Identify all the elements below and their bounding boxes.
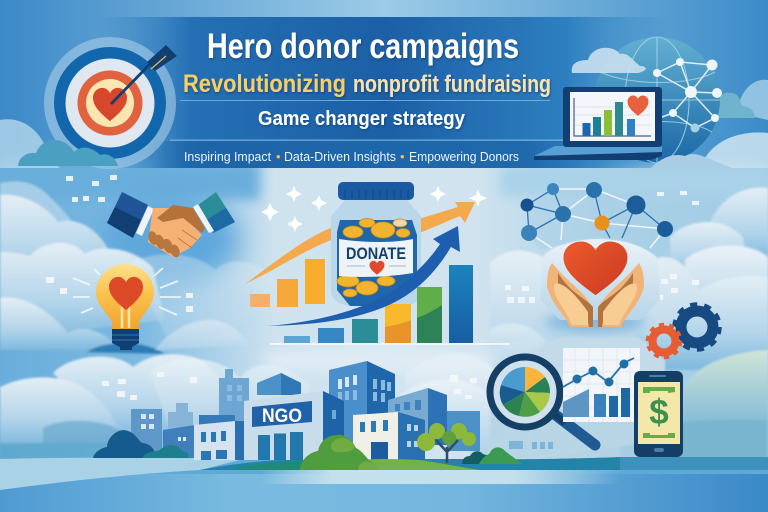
green hill [300,459,480,470]
jar label: DONATE [346,244,406,263]
bar chart: rising multicolour bars [270,265,510,345]
icon: magnifying glass with pie chart [490,357,595,445]
bar chart: rising orange bars [250,259,325,307]
pie chart [500,367,550,417]
bushes right [462,451,494,464]
left clouds [0,181,72,250]
background buildings [131,361,480,458]
icon: network graph [520,182,673,255]
ground and water [0,457,768,512]
icon: smartphone with dollar: $ [649,393,669,432]
light rays [73,268,181,315]
right clouds [700,187,768,260]
icon: target with heart [0,37,177,169]
icon: laptop with bar chart [534,87,662,160]
subtitle [183,70,551,98]
cloud beside target [18,140,118,166]
centre right clouds [490,239,702,350]
tagline: Empowering Donors [409,149,519,164]
blue shade near hands [545,312,645,332]
NGO sign: NGO [262,406,302,427]
small white building [194,415,244,460]
cloud behind heart [540,239,660,320]
icon: smartphone with dollar [634,371,683,457]
subtitle: nonprofit fundraising [353,71,551,98]
subtitle: Revolutionizing [183,70,346,98]
icon: lightbulb with heart [73,264,181,350]
header banner [100,17,670,168]
city: NGO buildings [0,361,768,512]
tagline: • [276,149,281,164]
centre haze [260,346,500,374]
clouds around globe [572,48,646,73]
icon: donation jar [331,182,421,306]
icon: hands holding heart [547,241,644,327]
title: Hero donor campaigns [207,27,519,66]
strategy heading: Game changer strategy [258,108,466,130]
cloud layers [0,181,768,462]
mini bars under magnifier [509,441,553,449]
coins [337,218,410,297]
tagline: Inspiring Impact [184,149,271,164]
icon: globe network [572,37,768,169]
cream building [353,412,425,460]
sparkles [261,186,487,232]
tagline [184,149,519,164]
dark bushes [93,430,189,458]
tree right [417,423,476,463]
tagline: Data-Driven Insights [284,149,396,164]
tree middle [300,435,378,470]
small white squares [46,175,699,400]
NGO building [244,391,344,460]
line and bar chart panel [563,348,640,422]
icon: gears [648,304,720,358]
arrow: orange growth [245,202,475,284]
tagline: • [400,149,405,164]
arrow: blue growth [267,226,460,326]
icon: handshake [107,192,235,259]
